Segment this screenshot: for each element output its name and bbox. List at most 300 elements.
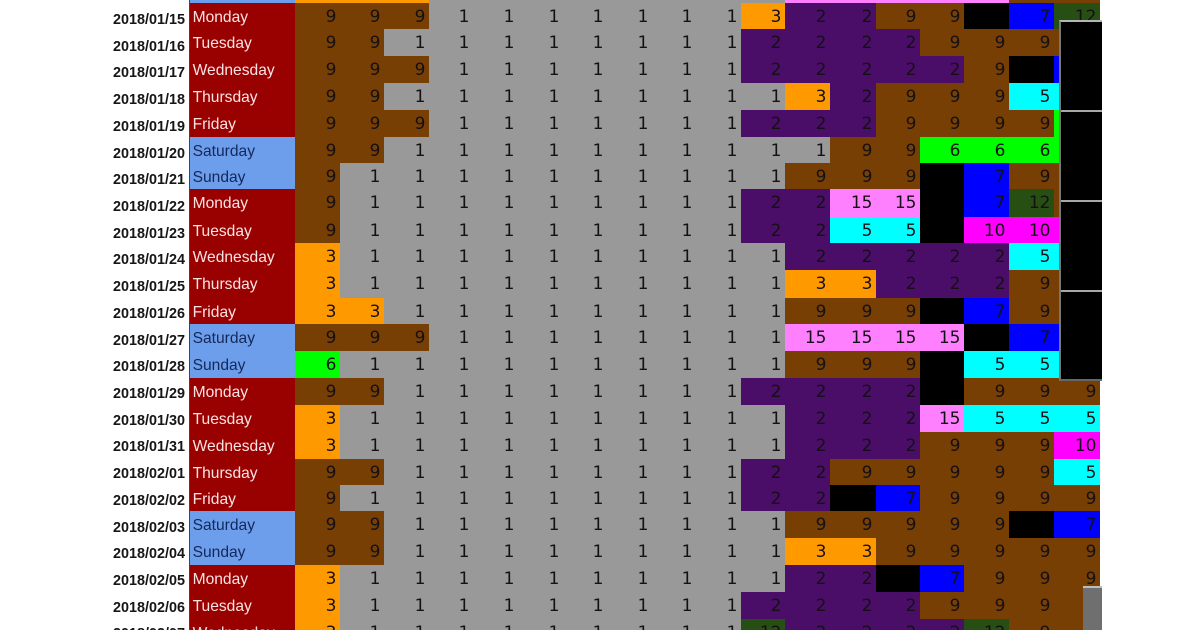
row: 2018/02/04: 1 <box>771 542 782 562</box>
row: 2018/02/02: 1 <box>727 489 738 509</box>
row: 2018/02/01: 1 <box>593 463 604 483</box>
row: 2018/01/16: 9 <box>950 33 960 53</box>
row: 2018/02/02 <box>190 485 1100 511</box>
row: 2018/01/31: 10 <box>1075 436 1096 456</box>
row: 2018/01/30: 1 <box>459 409 470 429</box>
row: 2018/02/05: 7 <box>950 569 960 589</box>
row: 2018/01/30: 5 <box>1086 409 1096 429</box>
row: 2018/01/31: Wednesday <box>193 438 275 454</box>
row: 2018/01/20: 1 <box>727 141 738 161</box>
row: 2018/01/19: Friday <box>193 116 236 132</box>
row: 2018/01/16: 1 <box>593 33 604 53</box>
row: 2018/01/21: 7 <box>995 167 1006 187</box>
row: 2018/01/16: 1 <box>682 33 692 53</box>
row: 2018/01/28: 1 <box>459 355 470 375</box>
row: 2018/01/27: 15 <box>895 328 916 348</box>
row: 2018/02/04: 9 <box>950 542 960 562</box>
row: 2018/01/18: Thursday <box>193 88 258 106</box>
row: 2018/02/05: 1 <box>415 569 426 589</box>
date column: 2018/01/15 <box>113 12 185 28</box>
row: 2018/01/29: 2 <box>862 382 872 402</box>
row: 2018/01/19: 2 <box>771 114 782 134</box>
row: 2018/01/15: 9 <box>950 7 960 27</box>
row: 2018/01/25: 1 <box>682 274 692 294</box>
row: 2018/02/02: 1 <box>682 489 692 509</box>
row: 2018/02/03: 9 <box>326 515 336 535</box>
row: 2018/01/20: 9 <box>862 141 872 161</box>
row: 2018/01/31: 1 <box>727 436 738 456</box>
row: 2018/01/28: 1 <box>638 355 648 375</box>
row: 2018/01/15: 9 <box>326 7 336 27</box>
row: 2018/01/23: 1 <box>638 221 648 241</box>
row: 2018/01/21: 9 <box>1040 167 1050 187</box>
row: 2018/02/01 <box>190 459 1100 485</box>
row: 2018/01/24: 1 <box>370 247 380 267</box>
row: 2018/01/24: 1 <box>682 247 692 267</box>
row: 2018/01/16: 9 <box>326 33 336 53</box>
row: 2018/01/17: 1 <box>593 60 604 80</box>
row: 2018/01/17: 1 <box>504 60 514 80</box>
row: 2018/01/29: 1 <box>682 382 692 402</box>
row: 2018/01/16: 1 <box>504 33 514 53</box>
row: 2018/01/30: 5 <box>995 409 1006 429</box>
row: 2018/01/18: 1 <box>459 87 470 107</box>
row: 2018/02/02: 2 <box>816 489 826 509</box>
row: 2018/01/20 <box>190 137 1059 163</box>
row: 2018/01/18: 9 <box>995 87 1006 107</box>
row: 2018/01/18: 1 <box>415 87 426 107</box>
scrollbar handle <box>1083 586 1102 630</box>
row: 2018/01/28: 9 <box>906 355 916 375</box>
row: 2018/01/28: 5 <box>1040 355 1050 375</box>
row: 2018/01/21 <box>190 163 1059 189</box>
row: 2018/01/25: 1 <box>549 274 560 294</box>
row: 2018/01/25: 1 <box>370 274 380 294</box>
row: 2018/01/27 <box>190 324 1059 351</box>
row: 2018/02/03: 9 <box>995 515 1006 535</box>
row: 2018/02/06: 2 <box>862 596 872 616</box>
row: 2018/01/30: 1 <box>682 409 692 429</box>
row: 2018/01/15: 7 <box>1040 7 1050 27</box>
date column: 2018/02/04 <box>113 546 185 562</box>
row: 2018/01/17: 1 <box>549 60 560 80</box>
row: 2018/01/24: 2 <box>862 247 872 267</box>
row: 2018/01/31: 3 <box>326 436 336 456</box>
row: previous day, clipped <box>190 0 1100 630</box>
row: 2018/01/28: 9 <box>816 355 826 375</box>
row: 2018/01/17 <box>190 56 1059 83</box>
row: 2018/02/02: 1 <box>638 489 648 509</box>
row: 2018/01/18: 9 <box>950 87 960 107</box>
row: 2018/01/30 <box>190 405 1100 432</box>
row: 2018/02/06: 2 <box>906 596 916 616</box>
row: 2018/01/21: 1 <box>370 167 380 187</box>
row: 2018/01/30: 1 <box>727 409 738 429</box>
row: 2018/01/31: 2 <box>862 436 872 456</box>
row: 2018/02/02: 9 <box>950 489 960 509</box>
row: 2018/01/21: 1 <box>549 167 560 187</box>
row: 2018/01/26: 1 <box>682 302 692 322</box>
row: 2018/01/20: 6 <box>995 141 1006 161</box>
row: 2018/01/23: 1 <box>549 221 560 241</box>
row: 2018/01/22: 1 <box>415 193 426 213</box>
row: 2018/01/16: 1 <box>549 33 560 53</box>
row: 2018/02/04: 9 <box>1086 542 1096 562</box>
row: 2018/02/03: 9 <box>816 515 826 535</box>
row: 2018/01/24: 2 <box>995 247 1006 267</box>
row: 2018/01/23: Tuesday <box>193 222 252 240</box>
row: 2018/02/06: 1 <box>593 596 604 616</box>
row: 2018/01/27: 7 <box>1040 328 1050 348</box>
row: 2018/02/05: 3 <box>326 569 336 589</box>
row: 2018/01/16: Tuesday <box>193 34 252 52</box>
row: 2018/01/28 <box>190 351 1059 378</box>
row: 2018/01/28: 9 <box>862 355 872 375</box>
row: 2018/01/28: 1 <box>415 355 426 375</box>
row: 2018/01/22: 1 <box>504 193 514 213</box>
row: 2018/02/05: Monday <box>193 570 248 588</box>
row: 2018/01/19: 1 <box>549 114 560 134</box>
row: 2018/01/25 <box>190 270 1059 298</box>
row: 2018/01/27: 1 <box>504 328 514 348</box>
row: 2018/01/20: Saturday <box>193 142 255 160</box>
row: 2018/01/26: 1 <box>459 302 470 322</box>
row: 2018/02/01: 9 <box>995 463 1006 483</box>
date column: 2018/02/06 <box>113 600 185 616</box>
row: 2018/01/22: 12 <box>1029 193 1050 213</box>
row: 2018/01/23: 10 <box>1029 221 1050 241</box>
row: 2018/01/15: 1 <box>549 7 560 27</box>
row: 2018/02/02: 1 <box>504 489 514 509</box>
row: 2018/02/04: 9 <box>906 542 916 562</box>
row: 2018/02/05: 1 <box>638 569 648 589</box>
row: 2018/02/03: 1 <box>771 515 782 535</box>
row: 2018/01/20: 6 <box>1040 141 1050 161</box>
row: 2018/01/21: 1 <box>638 167 648 187</box>
row: 2018/01/29: 9 <box>326 382 336 402</box>
row: 2018/01/16: 2 <box>906 33 916 53</box>
row: 2018/01/28: 1 <box>370 355 380 375</box>
row: 2018/02/04: 3 <box>816 542 826 562</box>
row: 2018/02/02: 1 <box>370 489 380 509</box>
row: 2018/01/23: 1 <box>727 221 738 241</box>
row: 2018/01/21: 1 <box>727 167 738 187</box>
row: 2018/01/27: 1 <box>771 328 782 348</box>
row: 2018/01/22: 15 <box>895 193 916 213</box>
row: 2018/01/28: 1 <box>682 355 692 375</box>
row: 2018/01/15: 2 <box>816 7 826 27</box>
row: 2018/01/31: 1 <box>459 436 470 456</box>
row: 2018/01/26: 3 <box>370 302 380 322</box>
row: 2018/02/05 <box>190 565 1100 592</box>
row: 2018/02/07 <box>190 619 1083 630</box>
row: 2018/01/18: 2 <box>862 87 872 107</box>
row: 2018/02/01: 1 <box>504 463 514 483</box>
row: 2018/01/17: Wednesday <box>193 62 275 78</box>
row: 2018/02/04: 1 <box>504 542 514 562</box>
row: 2018/01/27: 1 <box>549 328 560 348</box>
row: 2018/01/18: 1 <box>727 87 738 107</box>
row: 2018/01/23: 1 <box>593 221 604 241</box>
row: 2018/02/05: 2 <box>862 569 872 589</box>
row: 2018/01/15: 9 <box>415 7 426 27</box>
row: 2018/01/23: 9 <box>326 221 336 241</box>
row: 2018/01/19: 9 <box>415 114 426 134</box>
row: 2018/01/23: 1 <box>504 221 514 241</box>
row: 2018/02/03: 1 <box>638 515 648 535</box>
row: 2018/01/30: 1 <box>771 409 782 429</box>
row: 2018/01/27: 15 <box>805 328 826 348</box>
row: 2018/01/20: 1 <box>682 141 692 161</box>
row: 2018/01/22: 9 <box>326 193 336 213</box>
row: 2018/02/01: 1 <box>459 463 470 483</box>
row: 2018/02/02: 9 <box>995 489 1006 509</box>
row: 2018/01/26: 9 <box>1040 302 1050 322</box>
row: 2018/02/01: 9 <box>370 463 380 483</box>
row: 2018/01/28: 1 <box>771 355 782 375</box>
row: 2018/01/16: 2 <box>816 33 826 53</box>
row: 2018/02/01: 9 <box>326 463 336 483</box>
row: 2018/01/18: 1 <box>682 87 692 107</box>
row: 2018/02/01: 5 <box>1086 463 1096 483</box>
row: 2018/01/24: 2 <box>816 247 826 267</box>
row: 2018/01/21: 1 <box>459 167 470 187</box>
row: 2018/01/17: 2 <box>771 60 782 80</box>
row: 2018/02/06: 9 <box>995 596 1006 616</box>
row: 2018/01/30: 15 <box>939 409 960 429</box>
row: 2018/01/29: 9 <box>370 382 380 402</box>
row: 2018/01/31: 1 <box>638 436 648 456</box>
row: 2018/02/03: 1 <box>459 515 470 535</box>
row: 2018/01/31: 9 <box>995 436 1006 456</box>
row: 2018/01/19: 9 <box>906 114 916 134</box>
row: 2018/01/26: 9 <box>862 302 872 322</box>
row: 2018/01/16: 9 <box>1040 33 1050 53</box>
row: 2018/01/15: 12 <box>1075 7 1096 27</box>
row: 2018/02/06: 2 <box>771 596 782 616</box>
row: 2018/01/29: 9 <box>1040 382 1050 402</box>
row: 2018/02/05: 1 <box>771 569 782 589</box>
row: 2018/02/02: 1 <box>549 489 560 509</box>
row: 2018/01/16: 2 <box>771 33 782 53</box>
row: 2018/02/01: 9 <box>1040 463 1050 483</box>
row: 2018/01/25: 2 <box>950 274 960 294</box>
row: 2018/02/06 <box>190 592 1083 619</box>
row: 2018/01/23: 5 <box>862 221 872 241</box>
date column <box>113 12 185 630</box>
row: 2018/01/27: 15 <box>939 328 960 348</box>
row: 2018/01/29: 9 <box>995 382 1006 402</box>
row: 2018/01/30: 1 <box>370 409 380 429</box>
row: 2018/01/26: 1 <box>549 302 560 322</box>
row: 2018/01/17: 9 <box>995 60 1006 80</box>
row: 2018/01/27: 9 <box>370 328 380 348</box>
row: 2018/01/26: 7 <box>995 302 1006 322</box>
row: 2018/01/31: 1 <box>593 436 604 456</box>
date column: 2018/01/29 <box>113 386 185 402</box>
row: 2018/02/04: 1 <box>549 542 560 562</box>
row: 2018/01/20: 1 <box>504 141 514 161</box>
row: 2018/01/20: 1 <box>771 141 782 161</box>
row: 2018/02/02: Friday <box>193 490 236 508</box>
row: 2018/01/31: 9 <box>1040 436 1050 456</box>
row: 2018/01/30: 1 <box>549 409 560 429</box>
row: 2018/02/05: 1 <box>459 569 470 589</box>
row: 2018/01/24: 1 <box>771 247 782 267</box>
row: 2018/02/03: 9 <box>950 515 960 535</box>
row: 2018/01/18: 1 <box>593 87 604 107</box>
row: 2018/01/27: 1 <box>459 328 470 348</box>
row: 2018/01/26: 3 <box>326 302 336 322</box>
row: 2018/01/20: 1 <box>459 141 470 161</box>
row: 2018/01/31: 1 <box>370 436 380 456</box>
row: 2018/02/01: 1 <box>682 463 692 483</box>
row: 2018/02/04: 9 <box>326 542 336 562</box>
row: 2018/02/04: 3 <box>862 542 872 562</box>
row: 2018/02/04: Sunday <box>193 544 245 560</box>
row: 2018/01/18: 1 <box>549 87 560 107</box>
row: 2018/01/19: 1 <box>682 114 692 134</box>
row: 2018/01/22 <box>190 189 1059 217</box>
row: 2018/01/27: 1 <box>682 328 692 348</box>
row: 2018/01/25: 1 <box>593 274 604 294</box>
row: 2018/01/31: 2 <box>906 436 916 456</box>
row: 2018/01/17: 2 <box>906 60 916 80</box>
row: 2018/02/04: 1 <box>459 542 470 562</box>
row: 2018/01/23: 1 <box>459 221 470 241</box>
row: 2018/02/03: Saturday <box>193 516 255 534</box>
row: 2018/01/26: 9 <box>906 302 916 322</box>
row: 2018/01/28: 1 <box>593 355 604 375</box>
row: 2018/02/02: 9 <box>1040 489 1050 509</box>
row: 2018/02/06: 2 <box>816 596 826 616</box>
row: 2018/01/15: 2 <box>862 7 872 27</box>
row: 2018/01/17: 9 <box>326 60 336 80</box>
row: 2018/01/20: 1 <box>549 141 560 161</box>
date column: 2018/02/05 <box>113 573 185 589</box>
row: 2018/01/19: 9 <box>370 114 380 134</box>
row: 2018/02/03: 9 <box>370 515 380 535</box>
row: 2018/02/02: 1 <box>593 489 604 509</box>
row: 2018/01/30: 1 <box>593 409 604 429</box>
row: 2018/02/05: 9 <box>1086 569 1096 589</box>
row: 2018/01/23: 2 <box>816 221 826 241</box>
row: 2018/02/02: 7 <box>906 489 916 509</box>
row: 2018/01/31: 1 <box>504 436 514 456</box>
row: 2018/02/03 <box>190 511 1100 538</box>
row: 2018/01/25: 1 <box>638 274 648 294</box>
row: 2018/01/30: 2 <box>862 409 872 429</box>
row: 2018/01/20: 9 <box>906 141 916 161</box>
row: 2018/01/28: 1 <box>549 355 560 375</box>
row: 2018/02/06: 1 <box>370 596 380 616</box>
row: 2018/02/05: 9 <box>1040 569 1050 589</box>
row: 2018/01/17: 9 <box>415 60 426 80</box>
row: 2018/01/24: 1 <box>549 247 560 267</box>
row: 2018/01/20: 1 <box>638 141 648 161</box>
row: 2018/01/28: 1 <box>727 355 738 375</box>
row: 2018/01/26: 1 <box>504 302 514 322</box>
row: 2018/01/31: 1 <box>771 436 782 456</box>
row: 2018/02/01: 2 <box>816 463 826 483</box>
row: 2018/01/29: 1 <box>549 382 560 402</box>
row: 2018/02/02: 9 <box>1086 489 1096 509</box>
row: 2018/01/30: 5 <box>1040 409 1050 429</box>
row: 2018/01/25: 1 <box>459 274 470 294</box>
row: 2018/01/25: 1 <box>415 274 426 294</box>
row: 2018/01/19: 2 <box>816 114 826 134</box>
row: 2018/02/04 <box>190 538 1100 565</box>
row: 2018/01/31: 2 <box>816 436 826 456</box>
row: 2018/01/19: 9 <box>995 114 1006 134</box>
row: 2018/01/29: 1 <box>638 382 648 402</box>
row: 2018/01/21: 1 <box>682 167 692 187</box>
row: 2018/01/26: 1 <box>415 302 426 322</box>
row: 2018/01/17: 1 <box>682 60 692 80</box>
row: 2018/01/26: 1 <box>593 302 604 322</box>
row: 2018/01/23: 1 <box>682 221 692 241</box>
row: 2018/01/31 <box>190 432 1100 459</box>
row: 2018/02/06: 1 <box>415 596 426 616</box>
row: 2018/02/01: 9 <box>862 463 872 483</box>
row: 2018/01/25: 3 <box>816 274 826 294</box>
row: 2018/02/05: 1 <box>504 569 514 589</box>
row: 2018/02/06: 1 <box>638 596 648 616</box>
row: 2018/01/24: 1 <box>415 247 426 267</box>
row: 2018/01/25: 2 <box>906 274 916 294</box>
row: 2018/01/15: 3 <box>771 7 782 27</box>
row: 2018/01/15: 9 <box>906 7 916 27</box>
row: 2018/01/23: 1 <box>370 221 380 241</box>
row: 2018/01/25: 1 <box>504 274 514 294</box>
row: 2018/01/20: 9 <box>326 141 336 161</box>
row: 2018/01/27: Saturday <box>193 330 255 346</box>
row: 2018/01/20: 1 <box>593 141 604 161</box>
row: 2018/01/24: Wednesday <box>193 248 275 266</box>
row: 2018/01/22: 1 <box>370 193 380 213</box>
row: 2018/01/26: 9 <box>816 302 826 322</box>
row: 2018/01/30: 1 <box>504 409 514 429</box>
row: 2018/01/26: 1 <box>771 302 782 322</box>
row: 2018/02/04: 9 <box>1040 542 1050 562</box>
row: 2018/01/18: 9 <box>326 87 336 107</box>
row: 2018/01/18: 1 <box>638 87 648 107</box>
row: 2018/01/22: 2 <box>771 193 782 213</box>
row: 2018/01/27: 1 <box>727 328 738 348</box>
date column: 2018/01/22 <box>113 199 185 215</box>
row: 2018/01/24: 1 <box>593 247 604 267</box>
row: 2018/01/18: 1 <box>771 87 782 107</box>
date column: 2018/01/26 <box>113 306 185 322</box>
row: 2018/01/24: 5 <box>1040 247 1050 267</box>
row: 2018/01/19: 1 <box>504 114 514 134</box>
row: 2018/01/25: 9 <box>1040 274 1050 294</box>
row: 2018/01/19: 9 <box>1040 114 1050 134</box>
row: 2018/01/24: 3 <box>326 247 336 267</box>
row: 2018/01/17: 2 <box>950 60 960 80</box>
row: 2018/01/23: 1 <box>415 221 426 241</box>
row: 2018/01/16: 1 <box>459 33 470 53</box>
row: 2018/02/03: 1 <box>415 515 426 535</box>
row: 2018/01/29 <box>190 378 1100 405</box>
row: 2018/01/15: 1 <box>682 7 692 27</box>
date column: 2018/01/24 <box>113 252 185 268</box>
date column: 2018/01/16 <box>113 39 185 55</box>
date column: 2018/02/01 <box>113 466 185 482</box>
row: 2018/01/16: 1 <box>638 33 648 53</box>
row: 2018/01/17: 1 <box>459 60 470 80</box>
row: 2018/02/04: 1 <box>593 542 604 562</box>
